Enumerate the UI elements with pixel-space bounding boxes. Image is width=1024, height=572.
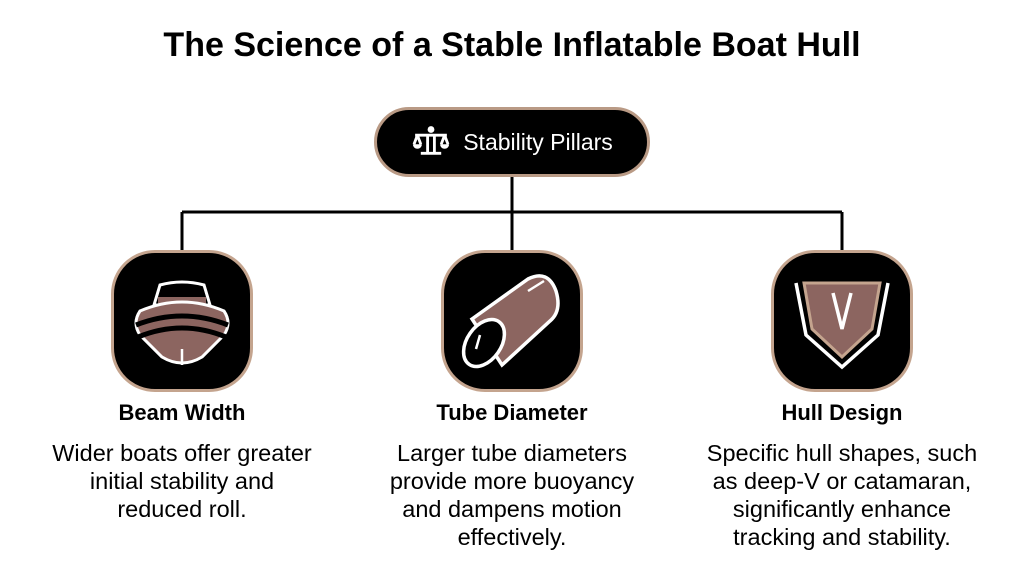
text: beam: Wider boats offer greater [52,440,312,466]
icon box: beam width [111,250,253,392]
heading: Hull Design: Hull Design [781,400,902,425]
text: tube: Larger tube diameters [397,440,627,466]
text: hull: tracking and stability. [733,524,951,550]
text: tube: provide more buoyancy [390,468,634,494]
text: hull: as deep-V or catamaran, [713,468,971,494]
heading: Tube Diameter: Tube Diameter [436,400,588,425]
text: tube: and dampens motion [402,496,622,522]
title: The Science of a Stable Inflatable Boat Hull [163,26,861,64]
icon box: tube [441,250,583,392]
text: beam: reduced roll. [117,496,247,522]
text: hull: Specific hull shapes, such [707,440,977,466]
pill: Stability Pillars [374,107,650,177]
text: hull [707,440,977,550]
text: tube: effectively. [458,524,566,550]
text: tube [390,440,634,550]
text: beam: initial stability and [90,468,274,494]
heading: Beam Width: Beam Width [119,400,245,425]
icon: scales [412,126,450,155]
text: hull: significantly enhance [733,496,951,522]
pill: Stability Pillars: Stability Pillars [463,128,613,154]
text: beam [52,440,312,522]
icon box: V hull [771,250,913,392]
